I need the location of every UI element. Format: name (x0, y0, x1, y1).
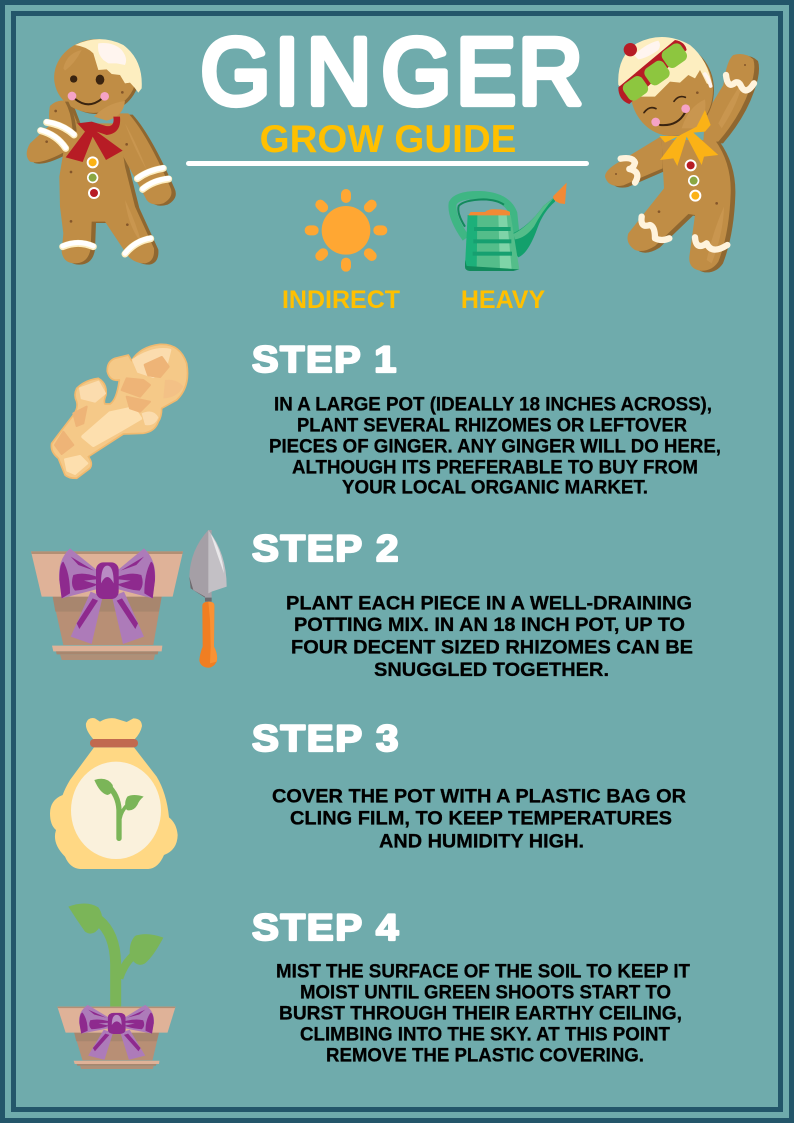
step 4 text: CLIMBING INTO THE SKY. AT THIS POINT (300, 1024, 670, 1046)
step 3 text (272, 786, 686, 852)
step 1 text: PLANT SEVERAL RHIZOMES OR LEFTOVER (297, 414, 687, 436)
subtitle: GROW GUIDE (260, 118, 516, 161)
step 1 text: ALTHOUGH ITS PREFERABLE TO BUY FROM (292, 456, 698, 478)
step 2 text: FOUR DECENT SIZED RHIZOMES CAN BE (291, 636, 693, 658)
step 1 text: IN A LARGE POT (IDEALLY 18 INCHES ACROSS), (274, 394, 712, 416)
step 3 text: COVER THE POT WITH A PLASTIC BAG OR (272, 786, 686, 808)
icon: sprout in pot (68, 903, 163, 1007)
icon: flower pot with bow (31, 548, 183, 660)
label: indirect: INDIRECT (282, 286, 400, 314)
step 4 text (276, 960, 690, 1066)
icon: right gingerbread man (605, 37, 759, 272)
label: heavy: HEAVY (461, 286, 545, 314)
title: GINGER (200, 18, 583, 124)
step 1 text (269, 394, 721, 498)
step 4 heading: STEP 4 (252, 907, 400, 948)
icon: small pot with bow (57, 1005, 176, 1069)
step 2 heading: STEP 2 (252, 528, 400, 569)
step 3 text: AND HUMIDITY HIGH. (379, 830, 584, 852)
step 1 text: YOUR LOCAL ORGANIC MARKET. (342, 476, 648, 498)
step 4 text: REMOVE THE PLASTIC COVERING. (326, 1044, 644, 1066)
icon: sun (305, 189, 387, 272)
step 3 heading: STEP 3 (252, 718, 400, 759)
step 2 text: SNUGGLED TOGETHER. (374, 659, 609, 681)
step 4 text: MOIST UNTIL GREEN SHOOTS START TO (300, 982, 671, 1004)
icon: left gingerbread man (27, 33, 176, 265)
step 2 text: POTTING MIX. IN AN 18 INCH POT, UP TO (294, 614, 685, 636)
step 1 heading: STEP 1 (252, 339, 398, 380)
step 3 text: CLING FILM, TO KEEP TEMPERATURES (290, 808, 672, 830)
step 2 text (286, 592, 693, 681)
icon: bag with sprout (50, 718, 178, 869)
step 4 text: MIST THE SURFACE OF THE SOIL TO KEEP IT (276, 960, 690, 982)
step 4 text: BURST THROUGH THEIR EARTHY CEILING, (279, 1002, 682, 1024)
icon: watering can (452, 183, 567, 271)
step 1 text: PIECES OF GINGER. ANY GINGER WILL DO HERE, (269, 436, 721, 458)
step 2 text: PLANT EACH PIECE IN A WELL-DRAINING (286, 592, 692, 614)
title divider (186, 161, 589, 166)
icon: ginger root (51, 344, 188, 478)
icon: trowel (189, 530, 227, 668)
